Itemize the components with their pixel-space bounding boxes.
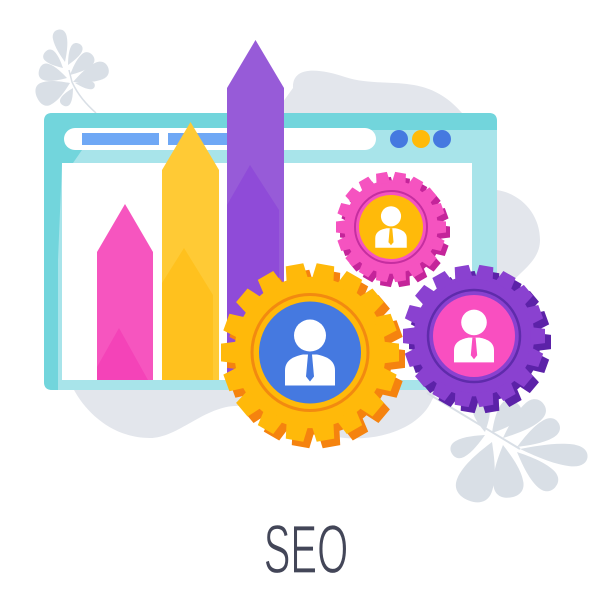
address bar tab 1 xyxy=(82,133,159,145)
arrow bar: pink xyxy=(97,204,153,380)
background blob xyxy=(74,71,540,438)
person icon xyxy=(285,320,335,386)
window button: blue xyxy=(433,130,451,148)
title: SEO xyxy=(264,511,348,588)
gear: pink with yellow person xyxy=(336,172,450,287)
arrow bar: purple xyxy=(227,40,284,380)
browser window xyxy=(44,113,497,390)
gear: large yellow with blue person xyxy=(221,263,405,449)
window button: blue xyxy=(390,130,408,148)
address bar tab 2 xyxy=(168,133,230,145)
window button: yellow xyxy=(412,130,430,148)
person icon xyxy=(454,310,494,362)
person icon xyxy=(375,206,407,248)
leaf sprig: bottom right xyxy=(427,393,589,507)
gear: purple with pink person xyxy=(403,265,551,413)
address bar xyxy=(64,128,376,150)
leaf sprig: top left xyxy=(32,28,111,113)
arrow bar: yellow xyxy=(162,122,219,380)
